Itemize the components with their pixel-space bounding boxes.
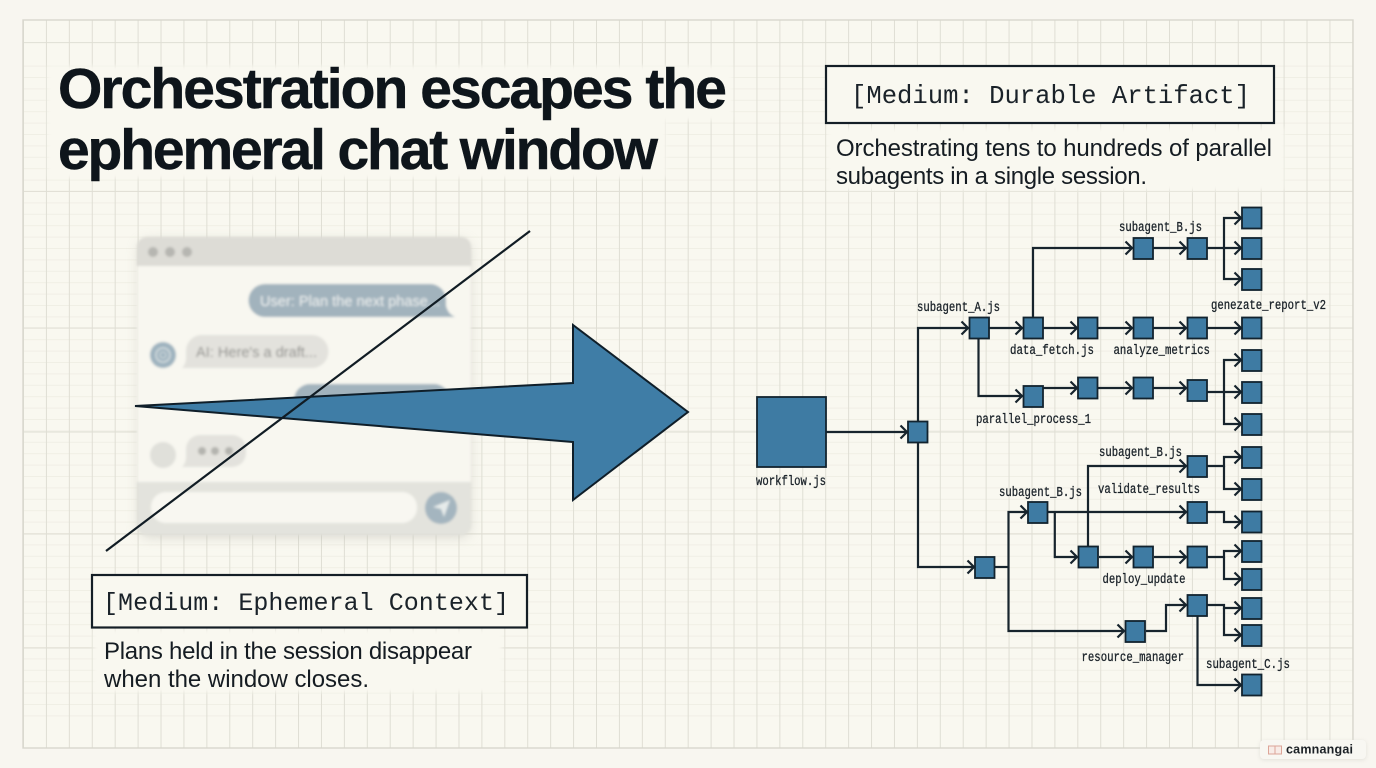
big transition arrow [135,325,688,500]
AI bubble: AI: Here's a draft... [196,345,317,361]
node labels: parallel_process_1 [976,413,1091,428]
watermark badge: camnangai [1286,742,1353,756]
node labels: subagent_B.js [999,486,1082,501]
node labels: workflow.js [756,475,826,490]
ephemeral label box [92,575,527,628]
AI bubble [182,335,329,368]
node labels: resource_manager [1082,651,1184,666]
input bar [137,482,471,535]
icon: book [1268,746,1282,754]
node labels: subagent_A.js [917,301,1000,316]
node labels: data_fetch.js [1010,344,1094,359]
input field [151,492,417,523]
ephemeral description: when the window closes. [103,666,369,693]
ephemeral description: Plans held in the session disappear [104,638,472,665]
title [58,57,727,182]
connectors [826,218,1241,685]
ephemeral description [103,638,472,693]
node labels: deploy_update [1102,573,1186,588]
durable label box [826,66,1274,123]
node labels [756,221,1326,673]
durable description: subagents in a single session. [836,163,1147,190]
ephemeral label box: [Medium: Ephemeral Context] [103,589,509,618]
node labels: subagent_C.js [1206,658,1290,673]
node labels: subagent_B.js [1099,446,1182,461]
title: Orchestration escapes the [58,57,727,121]
window title bar [137,237,471,266]
durable description: Orchestrating tens to hundreds of parallel [836,135,1272,162]
send button [425,492,457,524]
strike-through line [106,231,530,551]
window control dots [148,247,192,257]
AI avatar [150,342,176,368]
durable description [836,135,1272,190]
user bubble: User: Plan the next phase... [260,294,440,310]
title: ephemeral chat window [58,118,659,182]
typing avatar [150,442,176,468]
node labels: analyze_metrics [1114,344,1210,359]
node labels: subagent_B.js [1119,221,1202,236]
user bubble [248,284,455,317]
node labels: genezate_report_v2 [1211,299,1326,314]
task nodes [908,208,1262,696]
hidden user bubble [294,384,450,418]
blurred chat window [137,237,471,537]
window body [137,237,471,535]
typing bubble [182,435,246,467]
durable label box: [Medium: Durable Artifact] [851,82,1250,111]
workflow diagram [756,208,1326,696]
workflow node [757,397,826,467]
watermark badge [1260,740,1366,760]
node labels: validate_results [1098,483,1200,498]
